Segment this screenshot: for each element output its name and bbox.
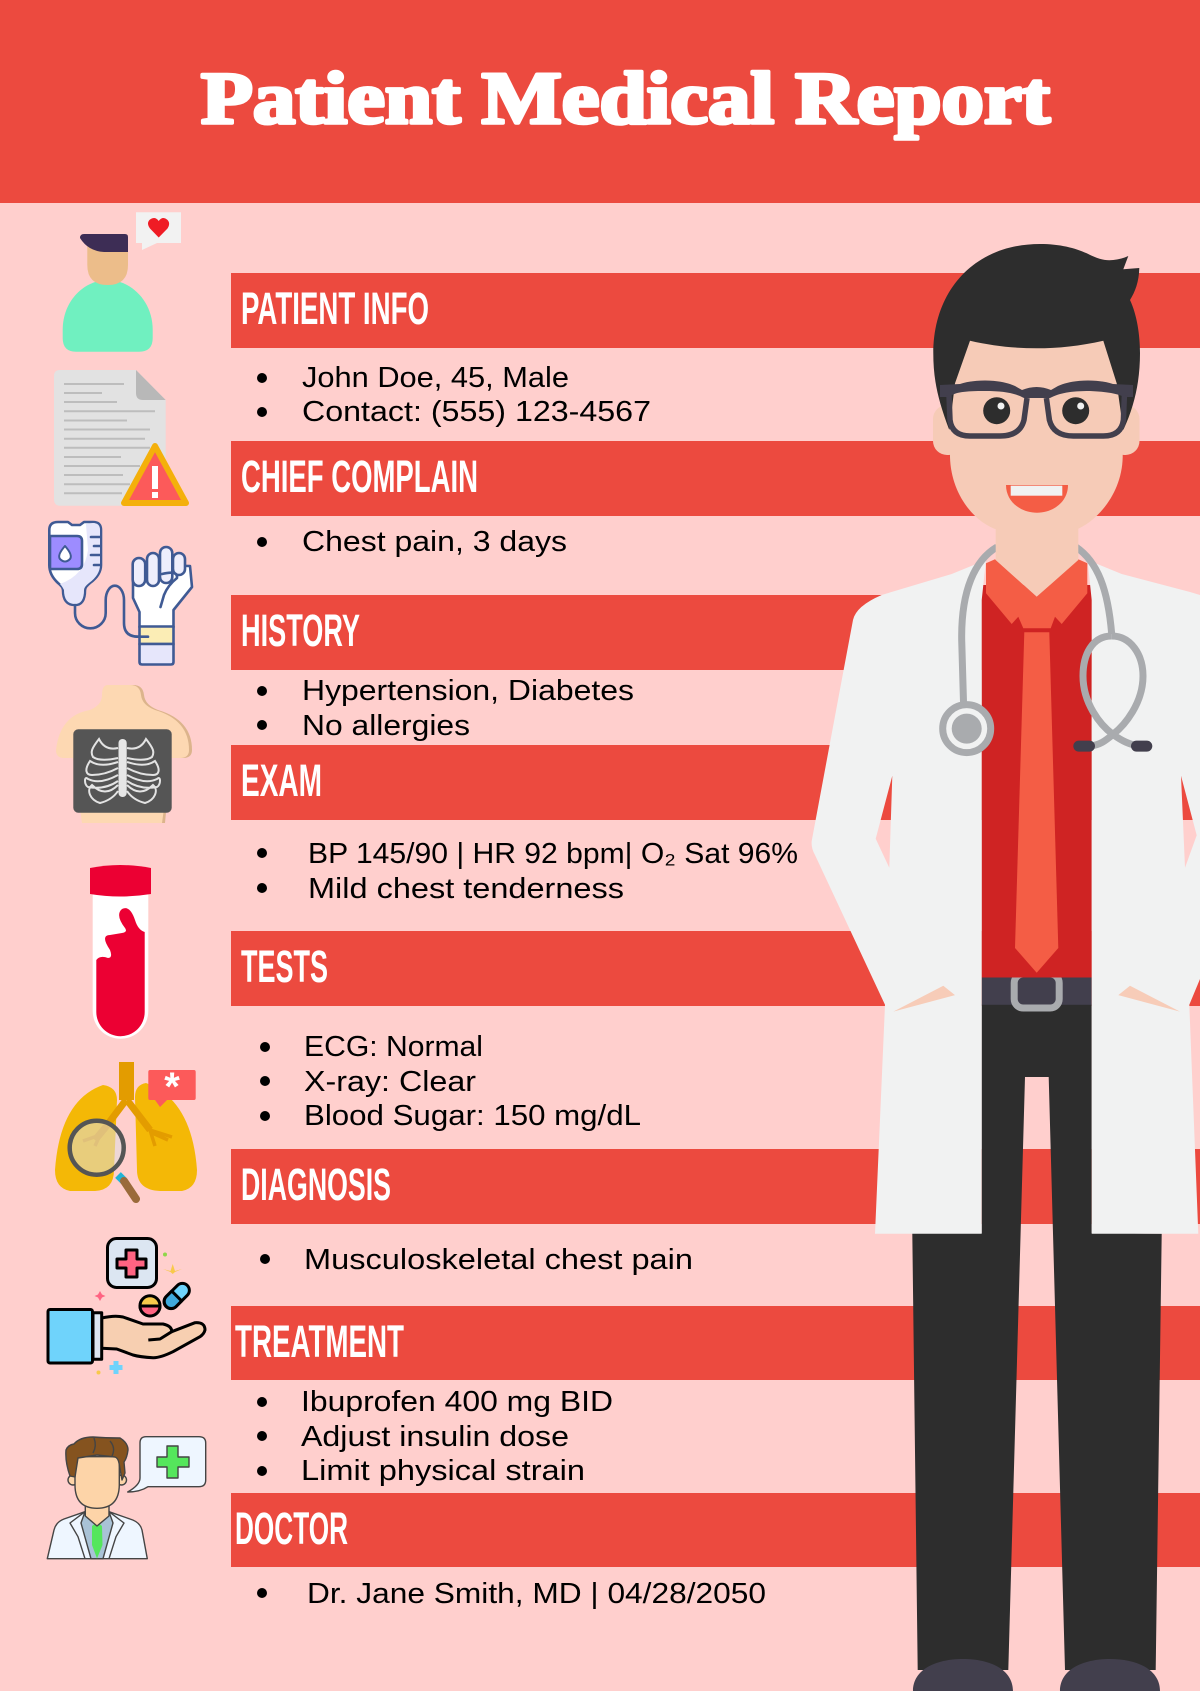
pockets: [893, 986, 1180, 1012]
neck: [996, 510, 1078, 597]
panel: doctor: [231, 1493, 1200, 1610]
head: [933, 244, 1140, 530]
panel: patient info: PATIENT INFO: [241, 283, 429, 334]
lab coat: [812, 560, 1200, 1234]
panel: history: HISTORY: [241, 605, 360, 656]
icon: doctor with speech bubble: [47, 1437, 206, 1559]
panel: treatment: Adjust insulin dose: [301, 1421, 569, 1453]
panel: tests: TESTS: [241, 941, 328, 992]
panel: history: Hypertension, Diabetes: [302, 675, 634, 707]
panel: patient info: Contact: (555) 123-4567: [302, 396, 651, 428]
panel: treatment: Ibuprofen 400 mg BID: [301, 1386, 613, 1418]
panel: doctor: Dr. Jane Smith, MD | 04/28/2050: [307, 1578, 766, 1610]
icon: IV drip and fist: [49, 522, 192, 664]
panel: history: No allergies: [302, 710, 470, 742]
glasses: [940, 380, 1133, 436]
panel: patient info: [231, 273, 1200, 428]
tie: [1015, 632, 1058, 973]
panel: exam: [231, 745, 1200, 905]
panel: exam: Mild chest tenderness: [308, 873, 624, 905]
panel: chief complain: [231, 441, 1200, 558]
shoes: [913, 1659, 1160, 1691]
illustration: doctor figure: [812, 244, 1200, 1691]
hair: [933, 244, 1140, 430]
panel: diagnosis: Musculoskeletal chest pain: [304, 1244, 693, 1276]
panel: treatment: TREATMENT: [235, 1316, 404, 1367]
panel: diagnosis: [231, 1149, 1200, 1276]
mouth: [1006, 485, 1068, 513]
icon: hand with medicine: [48, 1238, 205, 1374]
collar: [986, 559, 1087, 628]
icon: lungs with magnifier: *: [164, 1065, 180, 1109]
panel: exam: EXAM: [241, 755, 322, 806]
shirt: [982, 585, 1092, 978]
trousers: [912, 1004, 1162, 1670]
icon: lungs with magnifier: [55, 1062, 197, 1199]
panel: treatment: [231, 1306, 1200, 1487]
panel: tests: Blood Sugar: 150 mg/dL: [304, 1100, 641, 1132]
panel: tests: [231, 931, 1200, 1132]
panel: exam: BP 145/90 | HR 92 bpm| O₂ Sat 96%: [308, 838, 798, 870]
header banner: [0, 0, 1200, 203]
panel: chief complain: CHIEF COMPLAIN: [241, 451, 478, 502]
panel: tests: ECG: Normal: [304, 1031, 483, 1063]
title: Patient Medical Report: [201, 58, 1050, 140]
panel: diagnosis: DIAGNOSIS: [241, 1159, 391, 1210]
icon: blood test tube: [90, 865, 151, 1039]
panel: tests: X-ray: Clear: [304, 1066, 476, 1098]
panel: chief complain: Chest pain, 3 days: [302, 526, 567, 558]
icon: patient with heart bubble: [63, 212, 181, 352]
eyes: [983, 397, 1010, 424]
panel: doctor: DOCTOR: [235, 1503, 348, 1554]
stethoscope: [943, 547, 1152, 753]
icon: document with warning: [54, 370, 186, 506]
panel: patient info: John Doe, 45, Male: [302, 362, 569, 394]
panel: treatment: Limit physical strain: [301, 1455, 585, 1487]
belt: [982, 966, 1092, 1008]
panel: history: [231, 595, 1200, 742]
icon: chest x-ray: [56, 685, 192, 823]
